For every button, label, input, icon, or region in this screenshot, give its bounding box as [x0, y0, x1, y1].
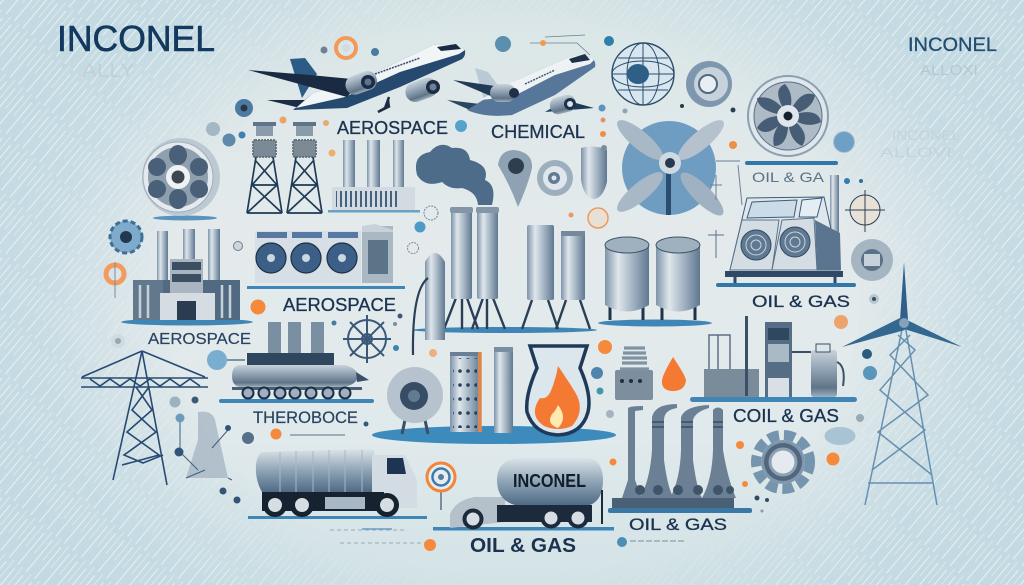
icon: capsule	[581, 146, 607, 199]
icon: orange and blue dots near flame	[591, 340, 612, 394]
icon: twin oil derricks	[247, 122, 322, 213]
label: Aerospace (left): AEROSPACE	[148, 331, 251, 348]
label: Aerospace (top): AEROSPACE	[337, 118, 448, 138]
icon: flame vase	[527, 346, 589, 435]
icon: turbine wheel left	[142, 138, 220, 220]
icon: factory with three stacks	[328, 140, 420, 212]
icon: metal hook fitting	[498, 150, 532, 207]
icon: glass blob	[824, 427, 856, 445]
icon: pressure gauge	[851, 239, 893, 281]
icon: crosshair dial	[845, 190, 885, 232]
icon: bottom dots	[424, 537, 685, 551]
icon: tanker truck	[248, 449, 427, 519]
icon: second tanker with Inconel label	[433, 458, 614, 530]
icon: tall smokestacks	[413, 207, 597, 333]
label: Theroboce: THEROBOCE	[253, 408, 358, 427]
icon: vertical probe	[413, 253, 445, 355]
icon: orange ring	[106, 262, 124, 298]
faint subtitle: alloy: ALLY	[82, 61, 135, 82]
label: Oil and gas (bottom right): OIL & GAS	[629, 515, 727, 534]
icon: metal ring	[686, 61, 732, 107]
decorative small parts	[111, 35, 879, 543]
title: Inconel: INCONEL	[57, 18, 215, 59]
faint subtitle right: alloy: ALLOXI	[920, 62, 978, 79]
icon: storage drums	[598, 237, 712, 326]
label: Oil and gas (right): OIL & GAS	[752, 292, 850, 311]
icon: gear	[756, 435, 810, 489]
icon: wind turbine tower	[842, 262, 962, 505]
icon: propeller on blue disc	[612, 114, 729, 221]
label: Oil and gas (bottom): OIL & GAS	[470, 535, 576, 557]
icon: ship wheel	[343, 315, 391, 363]
icon: orange dot	[250, 300, 266, 314]
icon: orange target	[427, 463, 455, 510]
label: Oil and gas (faded): OIL & GA	[752, 169, 825, 185]
icon: electricity pylon	[81, 351, 208, 485]
icon: cooling unit	[716, 175, 856, 287]
icon: perforated cylinder	[450, 352, 482, 432]
faint watermark text: INCONEL	[892, 127, 960, 143]
title right: Inconel: INCONEL	[908, 35, 997, 56]
icon: globe wireframe	[612, 43, 674, 105]
icon: second airplane	[447, 54, 595, 116]
icon: orange dots right	[610, 441, 840, 487]
faint watermark text: ALLOVI	[880, 144, 952, 160]
icon: rail tank	[219, 322, 374, 403]
icon: smoke cloud	[416, 145, 493, 205]
icon: spherical reactor	[387, 367, 443, 434]
icon: blue sphere	[834, 132, 854, 152]
label: Aerospace (middle): AEROSPACE	[283, 295, 396, 315]
icon: engine nodes	[207, 350, 245, 370]
faint watermark text	[880, 127, 960, 160]
icon: metal column	[494, 347, 513, 433]
icon: refinery unit	[690, 316, 857, 402]
icon: concentric ring	[537, 160, 573, 196]
icon: blue dots near turbine	[862, 349, 877, 380]
icon: reactor group base	[372, 426, 616, 444]
label: Coil and gas: COIL & GAS	[733, 406, 839, 426]
icon: threaded machine	[615, 348, 653, 400]
icon: power plant	[121, 229, 253, 326]
icon: eroded tower	[174, 412, 254, 504]
icon: fan bank with building	[247, 224, 405, 289]
icon: large airplane	[248, 44, 465, 112]
icon: small gear	[110, 221, 142, 253]
icon: turbine fan right	[745, 76, 838, 165]
icon: flame drop	[662, 357, 686, 391]
label: Chemical: CHEMICAL	[491, 122, 585, 142]
label: Inconel on tank: INCONEL	[513, 471, 586, 491]
icon: flue stacks	[608, 404, 752, 513]
